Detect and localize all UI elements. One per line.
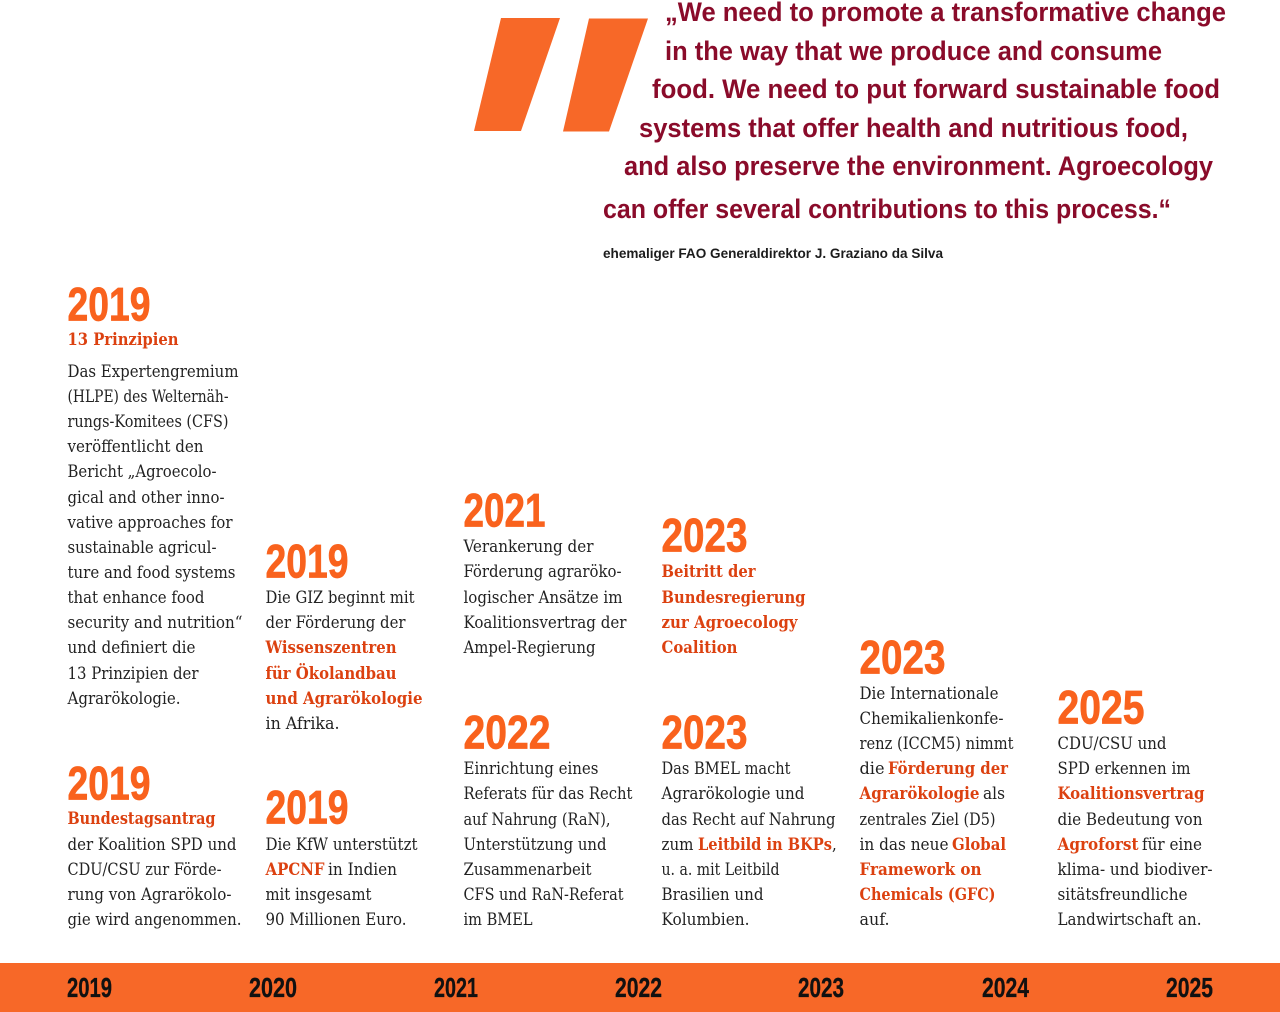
milestone: 2025 Koalitionsvertrag Agroforst: Agroforst [1056,835,1139,854]
milestone: 2025 Koalitionsvertrag Agroforst: für eine [1142,835,1202,854]
milestone: 2025 Koalitionsvertrag Agroforst: SPD erkennen im [1058,759,1190,778]
milestone: 2019 GIZ Wissenszentren: Wissenszentren [264,638,397,657]
milestone: 2023 Agroecology Coalition: Beitritt der [662,562,756,581]
milestone: 2019 13 Prinzipien: Bericht „Agroecolo- [68,462,217,481]
milestone: 2019 13 Prinzipien: 2019 [68,278,150,330]
milestone: 2019 GIZ Wissenszentren: in Afrika. [266,714,340,733]
milestone: 2019 13 Prinzipien: sustainable agricul- [68,538,216,557]
milestone: 2023 BMEL Leitbild: , [832,835,837,854]
milestone: 2022 RaN-Referat: auf Nahrung (RaN), [464,810,610,829]
milestone: 2019 KfW APCNF: 2019 [266,780,348,834]
milestone: 2019 Bundestagsantrag: gie wird angenommen. [68,910,242,929]
timeline bar: 2022 [615,972,662,1003]
milestone: 2021 Koalitionsvertrag: Förderung agraröko- [464,562,622,581]
milestone: 2023 ICCM5: Global [952,835,1006,854]
milestone: 2023 Agroecology Coalition: Coalition [662,638,738,657]
milestone: 2025 Koalitionsvertrag Agroforst: CDU/CSU und [1058,734,1167,753]
milestone: 2025 Koalitionsvertrag Agroforst: klima- und biodiver- [1058,860,1212,879]
milestone: 2019 13 Prinzipien: 13 Prinzipien [68,330,179,349]
milestone: 2019 13 Prinzipien: Das Expertengremium [68,362,239,381]
milestone: 2023 BMEL Leitbild [660,706,837,929]
milestone: 2023 BMEL Leitbild: u. a. mit Leitbild [662,860,780,879]
milestone: 2023 ICCM5: Agrarökologie [858,784,980,803]
milestone: 2019 GIZ Wissenszentren: Die GIZ beginnt mit [266,588,415,607]
milestone: 2019 KfW APCNF: mit insgesamt [266,885,372,904]
milestone: 2023 ICCM5: zentrales Ziel (D5) [860,810,996,829]
milestone: 2019 13 Prinzipien: 13 Prinzipien der [68,664,199,683]
milestone: 2021 Koalitionsvertrag: Ampel-Regierung [462,638,596,657]
milestone: 2019 13 Prinzipien: veröffentlicht den [66,437,204,456]
milestone: 2023 BMEL Leitbild: zum [662,835,694,854]
milestone: 2022 RaN-Referat: Referats für das Recht [464,784,633,803]
milestone: 2022 RaN-Referat: Einrichtung eines [464,759,598,778]
milestone: 2023 ICCM5: Chemicals (GFC) [860,885,996,904]
milestone: 2023 ICCM5: Die Internationale [860,684,999,703]
timeline bar: 2023 [798,972,844,1003]
milestone: 2019 13 Prinzipien [66,278,243,708]
milestone: 2019 13 Prinzipien: (HLPE) des Welternäh- [68,387,228,406]
milestone: 2019 KfW APCNF: in Indien [328,860,397,879]
milestone: 2025 Koalitionsvertrag Agroforst [1056,680,1212,929]
timeline bar: 2019 [67,972,112,1003]
milestone: 2022 RaN-Referat: CFS und RaN-Referat [464,885,624,904]
milestone: 2023 ICCM5: in das neue [860,835,949,854]
icon: quotation marks [474,18,648,132]
milestone: 2019 Bundestagsantrag: Bundestagsantrag [68,809,216,828]
milestone: 2019 13 Prinzipien: ture and food systems [68,563,236,582]
quote text [603,0,1226,224]
milestone: 2022 RaN-Referat [464,706,633,929]
milestone: 2019 13 Prinzipien: vative approaches for [66,513,233,532]
milestone: 2025 Koalitionsvertrag Agroforst: die Bedeutung von [1058,810,1203,829]
milestone: 2021 Koalitionsvertrag [462,484,627,657]
quote text: in the way that we produce and consume [665,36,1162,66]
milestone: 2019 KfW APCNF: 90 Millionen Euro. [266,910,406,929]
milestone: 2022 RaN-Referat: Zusammenarbeit [464,860,592,879]
milestone: 2023 ICCM5: Förderung der [888,759,1008,778]
milestone: 2019 13 Prinzipien: und definiert die [68,638,196,657]
milestone: 2019 GIZ Wissenszentren [264,534,422,733]
milestone: 2021 Koalitionsvertrag: logischer Ansätze im [464,588,622,607]
milestone: 2023 BMEL Leitbild: Agrarökologie und [660,784,805,803]
milestone: 2023 ICCM5 [858,630,1014,929]
quote text: and also preserve the environment. Agroecology [624,151,1213,181]
quote attribution: ehemaliger FAO Generaldirektor J. Graziano da Silva [603,245,943,261]
timeline bar: 2020 [249,972,297,1003]
milestone: 2019 KfW APCNF: Die KfW unterstützt [266,835,418,854]
milestone: 2023 Agroecology Coalition: zur Agroecology [662,613,798,632]
milestone: 2022 RaN-Referat: im BMEL [464,910,533,929]
milestone: 2021 Koalitionsvertrag: Verankerung der [462,537,594,556]
milestone: 2023 ICCM5: 2023 [860,630,946,684]
milestone: 2019 13 Prinzipien: Agrarökologie. [66,689,180,708]
quote text: food. We need to put forward sustainable food [652,74,1220,104]
milestone: 2022 RaN-Referat: Unterstützung und [464,835,607,854]
milestone: 2019 Bundestagsantrag: 2019 [68,756,150,810]
milestone: 2019 Bundestagsantrag [68,756,242,929]
milestone: 2023 Agroecology Coalition: 2023 [662,508,748,562]
milestone: 2019 Bundestagsantrag: der Koalition SPD und [68,835,237,854]
milestone: 2023 ICCM5: als [983,784,1005,803]
milestone: 2022 RaN-Referat: 2022 [464,706,550,758]
timeline bar: 2024 [982,972,1029,1003]
milestone: 2019 GIZ Wissenszentren: für Ökolandbau [266,663,397,683]
milestone: 2019 KfW APCNF: APCNF [264,860,325,879]
milestone: 2019 GIZ Wissenszentren: 2019 [266,534,348,588]
milestone: 2019 13 Prinzipien: security and nutrition“ [68,613,242,632]
milestone: 2019 GIZ Wissenszentren: und Agrarökologie [266,689,422,708]
milestone: 2023 ICCM5: die [860,759,885,778]
timeline bar: 2025 [1166,972,1213,1003]
milestone: 2019 KfW APCNF [264,780,418,929]
milestone: 2023 BMEL Leitbild: das Recht auf Nahrung [662,810,836,829]
milestone: 2019 13 Prinzipien: that enhance food [68,588,205,607]
milestone: 2021 Koalitionsvertrag: 2021 [464,484,546,536]
milestone: 2019 13 Prinzipien: rungs-Komitees (CFS) [68,412,228,431]
milestone: 2023 BMEL Leitbild: Leitbild in BKPs [698,835,832,854]
milestone: 2021 Koalitionsvertrag: Koalitionsvertrag der [464,613,627,632]
milestone: 2023 ICCM5: Chemikalienkonfe- [860,709,1004,728]
milestone: 2023 ICCM5: auf. [860,910,890,929]
milestone: 2025 Koalitionsvertrag Agroforst: Landwirtschaft an. [1058,910,1202,929]
milestone: 2023 ICCM5: Framework on [860,860,982,879]
milestone: 2025 Koalitionsvertrag Agroforst: 2025 [1058,680,1144,734]
quote text: systems that offer health and nutritious food, [639,113,1188,143]
milestone: 2025 Koalitionsvertrag Agroforst: sitätsfreundliche [1058,885,1188,904]
milestone: 2019 Bundestagsantrag: rung von Agrarökolo- [68,885,232,904]
quote text: can offer several contributions to this process.“ [603,194,1171,224]
timeline bar [0,963,1280,1012]
milestone: 2023 BMEL Leitbild: Das BMEL macht [662,759,791,778]
milestone: 2023 Agroecology Coalition: Bundesregierung [662,588,806,607]
milestone: 2023 ICCM5: renz (ICCM5) nimmt [860,734,1014,753]
timeline bar: 2021 [434,972,478,1003]
milestone: 2019 Bundestagsantrag: CDU/CSU zur Förde- [68,860,222,879]
milestone: 2023 Agroecology Coalition [662,508,806,657]
milestone: 2019 GIZ Wissenszentren: der Förderung der [266,613,406,632]
milestone: 2025 Koalitionsvertrag Agroforst: Koalitionsvertrag [1058,784,1205,803]
milestone: 2023 BMEL Leitbild: 2023 [662,706,748,758]
milestone: 2023 BMEL Leitbild: Brasilien und [662,885,764,904]
milestone: 2023 BMEL Leitbild: Kolumbien. [662,910,750,929]
milestone: 2019 13 Prinzipien: gical and other inno- [68,488,224,507]
